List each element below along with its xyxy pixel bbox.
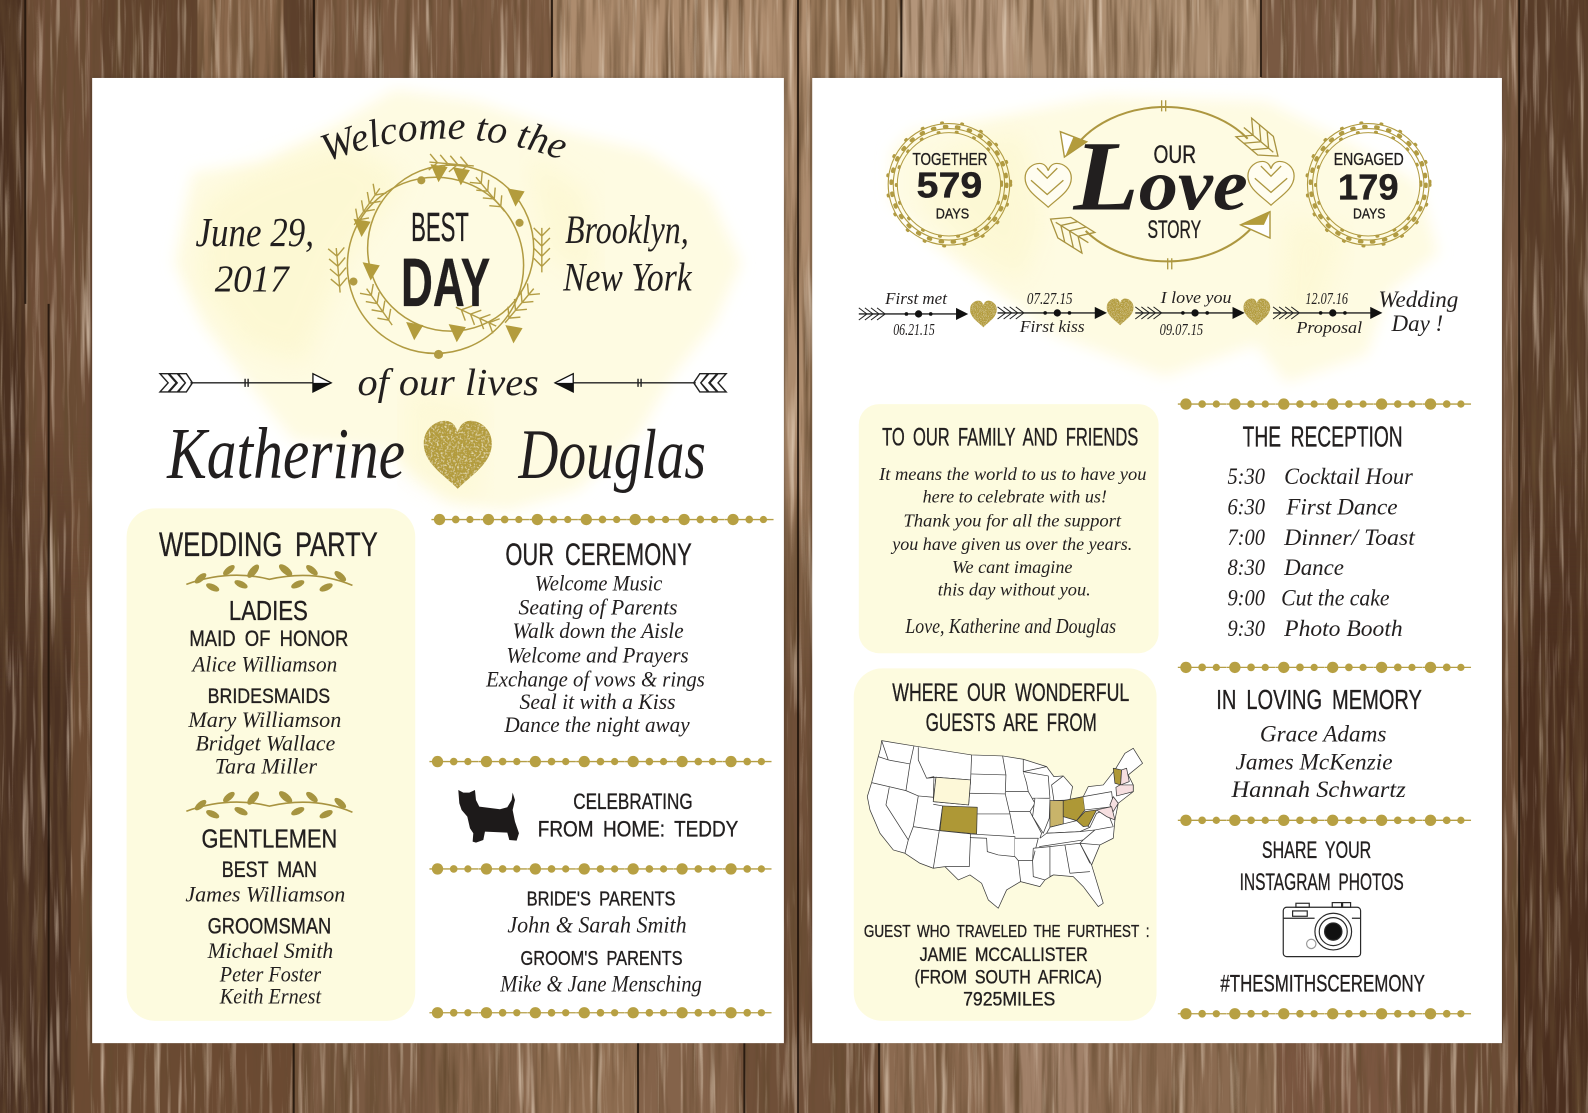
timeline: 06.21.15 (893, 320, 935, 339)
divider (429, 756, 772, 767)
section: our ceremony: Welcome Music (535, 570, 662, 595)
arrow ring (1044, 100, 1286, 269)
timeline: 09.07.15 (1160, 320, 1203, 339)
icon: camera (1283, 903, 1361, 957)
section: our ceremony (485, 537, 705, 737)
timeline: First met (884, 289, 948, 308)
location (562, 207, 693, 300)
date: June 29, (195, 209, 314, 255)
ladies list: Bridget Wallace (195, 730, 335, 755)
arrow: right (555, 374, 726, 392)
section: our ceremony: Seal it with a Kiss (520, 689, 676, 714)
text: celebrating from home (538, 789, 738, 842)
section: our ceremony: Seating of Parents (519, 595, 678, 620)
text: celebrating from home: CELEBRATING (573, 789, 693, 814)
panel: guest map: GUEST WHO TRAVELED THE FURTHEST : (864, 921, 1149, 941)
timeline: I love you (1160, 288, 1232, 307)
heading: our love story: STORY (1147, 216, 1201, 244)
section: in loving memory: IN LOVING MEMORY (1216, 684, 1422, 715)
panel: note to family and friends: TO OUR FAMILY AND FRIENDS (882, 424, 1138, 452)
location: New York (562, 255, 693, 300)
ladies list: MAID OF HONOR (189, 626, 348, 651)
ladies list: Alice Williamson (191, 651, 337, 676)
section: the reception schedule (1227, 422, 1415, 642)
chart: US map of guest states (867, 741, 1143, 908)
panel: note to family and friends: you have given us over the years. (890, 534, 1132, 554)
section: parents: John & Sarah Smith (507, 913, 687, 939)
section: our ceremony: Exchange of vows & rings (485, 667, 705, 692)
date (195, 209, 314, 301)
section: our ceremony: OUR CEREMONY (505, 537, 692, 572)
timeline: 12.07.16 (1305, 289, 1348, 308)
heading: our love story: Love (1072, 123, 1248, 232)
section: our ceremony: Welcome and Prayers (506, 642, 689, 667)
heading: our love story: OUR (1154, 141, 1196, 169)
name: Katherine: Katherine (166, 413, 405, 494)
panel: note to family and friends: here to celebrate with us! (923, 486, 1107, 506)
section: the reception schedule: 8:30 (1227, 555, 1265, 581)
gentlemen list: Peter Foster (219, 961, 321, 986)
badge: together 579 days (887, 123, 1011, 246)
section: share instagram photos: SHARE YOUR (1262, 837, 1371, 864)
divider (1178, 662, 1471, 673)
ladies list (187, 595, 348, 779)
section: the reception schedule: 7:00 (1227, 525, 1265, 551)
gentlemen list (185, 824, 345, 1009)
panel: wedding party (127, 508, 415, 1021)
divider sprig (186, 789, 352, 820)
gentlemen list: Michael Smith (207, 938, 333, 963)
panel: note to family and friends: this day without you. (938, 579, 1091, 599)
section: in loving memory: Grace Adams (1260, 721, 1386, 747)
panel: note to family and friends: Love, Katherine and Douglas (905, 614, 1116, 638)
badge: engaged 179 days (1306, 123, 1430, 246)
section: in loving memory (1216, 684, 1422, 803)
section: share instagram photos: INSTAGRAM PHOTOS (1240, 869, 1404, 896)
ladies list: LADIES (229, 595, 308, 626)
section: our ceremony: Dance the night away (503, 712, 690, 737)
badge: engaged 179 days: 179 (1338, 167, 1399, 208)
panel: guest map: JAMIE MCCALLISTER (920, 945, 1088, 966)
section: parents: GROOM'S PARENTS (521, 948, 683, 970)
text: of our lives: of our lives (358, 362, 539, 404)
name: Douglas: Douglas (518, 416, 706, 494)
panel: right story page (812, 78, 1502, 1043)
divider (1178, 398, 1471, 410)
badge: engaged 179 days: DAYS (1353, 206, 1385, 223)
section: the reception schedule: 9:00 (1227, 586, 1265, 612)
text: DAY: DAY (401, 244, 490, 321)
section: the reception schedule: Dinner/ Toast (1283, 525, 1415, 551)
panel: guest map: 7925MILES (963, 990, 1055, 1011)
panel: note to family and friends: It means the world to us to have you (878, 464, 1146, 484)
section: share instagram photos: #THESMITHSCEREMONY (1220, 970, 1425, 997)
section: in loving memory: Hannah Schwartz (1230, 777, 1406, 803)
section: the reception schedule: Photo Booth (1283, 616, 1403, 642)
panel: guest map: (FROM SOUTH AFRICA) (915, 967, 1102, 988)
gentlemen list: Keith Ernest (219, 984, 322, 1009)
ladies list: Mary Williamson (187, 707, 341, 732)
panel: guest map (854, 668, 1157, 1021)
timeline: Wedding (1378, 287, 1458, 313)
panel: note to family and friends (859, 404, 1159, 653)
badge: together 579 days: TOGETHER (912, 149, 987, 169)
timeline: Day ! (1391, 311, 1443, 337)
date: 2017 (215, 259, 290, 301)
gentlemen list: James Williamson (185, 881, 345, 906)
badge: together 579 days: DAYS (936, 206, 969, 223)
section: parents: Mike & Jane Mensching (499, 971, 702, 997)
watercolor wash: right (891, 96, 1438, 383)
badge: together 579 days: 579 (917, 164, 982, 205)
section: the reception schedule: First Dance (1285, 494, 1398, 520)
gentlemen list: BEST MAN (222, 857, 317, 882)
section: the reception schedule: 5:30 (1227, 464, 1265, 490)
text: celebrating from home: FROM HOME: TEDDY (538, 817, 738, 842)
section: share instagram photos (1220, 837, 1425, 997)
ladies list: Tara Miller (215, 754, 317, 779)
arrow: left (160, 374, 331, 392)
heading: wedding party: WEDDING PARTY (159, 526, 378, 564)
section: the reception schedule: Cocktail Hour (1284, 464, 1414, 490)
divider (1178, 1008, 1471, 1019)
gentlemen list: GENTLEMEN (202, 824, 337, 854)
ladies list: BRIDESMAIDS (208, 684, 330, 708)
divider (429, 1007, 772, 1018)
panel: note to family and friends: We cant imagine (952, 557, 1073, 577)
panel: left program page (90, 76, 786, 1044)
section: the reception schedule: Dance (1283, 555, 1344, 581)
section: the reception schedule: THE RECEPTION (1243, 422, 1403, 454)
section: the reception schedule: Cut the cake (1281, 586, 1389, 612)
panel: guest map: WHERE OUR WONDERFUL (892, 679, 1129, 707)
section: the reception schedule: 9:30 (1227, 616, 1265, 642)
timeline (859, 287, 1458, 339)
panel: guest map: GUESTS ARE FROM (926, 709, 1097, 737)
watercolor wash: left (174, 89, 741, 511)
heading: Welcome to the: Welcome to the (320, 118, 566, 160)
timeline: 07.27.15 (1027, 289, 1073, 308)
divider sprig (186, 562, 352, 593)
section: the reception schedule: 6:30 (1227, 494, 1265, 520)
icon: dog (458, 790, 519, 843)
icon: gold heart (424, 421, 492, 489)
section: parents (499, 888, 702, 997)
divider (429, 863, 772, 875)
timeline: Proposal (1295, 318, 1362, 337)
divider (431, 514, 774, 525)
section: our ceremony: Walk down the Aisle (512, 618, 684, 643)
gentlemen list: GROOMSMAN (208, 914, 331, 939)
panel: note to family and friends: Thank you for all the support (903, 511, 1122, 531)
wreath with arrows (328, 154, 550, 359)
divider (1178, 815, 1471, 826)
section: in loving memory: James McKenzie (1236, 750, 1393, 776)
icons: outlined hearts (1025, 161, 1294, 207)
badge: engaged 179 days: ENGAGED (1334, 149, 1404, 169)
section: parents: BRIDE'S PARENTS (527, 888, 676, 910)
timeline: First kiss (1019, 317, 1085, 336)
location: Brooklyn, (565, 207, 689, 252)
text: BEST: BEST (411, 204, 469, 250)
